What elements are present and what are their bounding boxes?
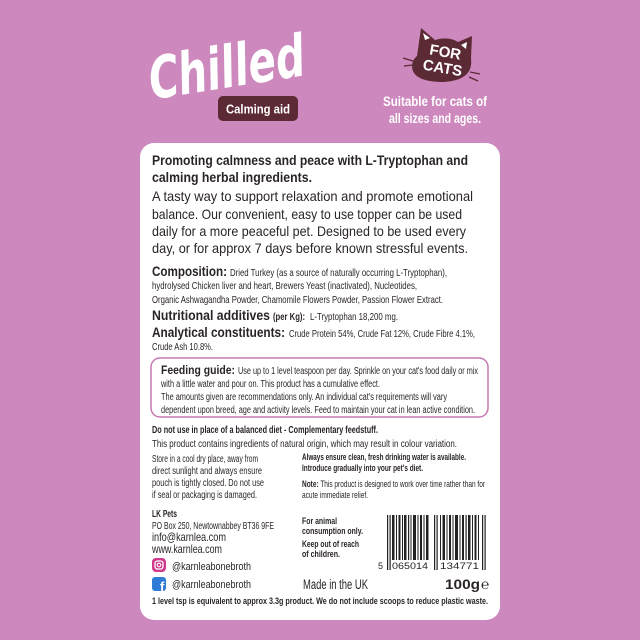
icon: cat head: CATS xyxy=(421,57,464,80)
text: made in the UK: Made in the UK xyxy=(303,577,368,592)
text: composition: L-Tryptophan 18,200 mg. xyxy=(310,311,398,323)
icon: instagram xyxy=(152,558,166,572)
icon: facebook: f xyxy=(160,579,165,594)
text: animal consumption: Keep out of reach xyxy=(302,539,359,550)
text: water and note: acute immediate relief. xyxy=(302,490,368,500)
text: composition xyxy=(152,263,475,353)
text: composition: Organic Ashwagandha Powder, Chamomile Flowers Powder, Passion Flower Extract. xyxy=(152,294,443,306)
icon: cat head: FOR xyxy=(428,41,463,64)
text: description xyxy=(152,188,473,256)
text: description: A tasty way to support relaxation and promote emotional xyxy=(152,188,473,204)
text: warnings: Do not use in place of a balanced diet - Complementary feedstuff. xyxy=(152,425,378,436)
text: contact xyxy=(151,508,274,556)
text: storage: if seal or packaging is damaged. xyxy=(152,490,257,501)
text: weight 100g: ℮ xyxy=(481,576,489,592)
text: animal consumption: consumption only. xyxy=(302,526,363,537)
text: composition: Nutritional additives xyxy=(152,307,270,323)
text: description: day, or for approx 7 days before known stressful events. xyxy=(152,240,468,256)
text: water and note xyxy=(302,452,485,500)
barcode: 5 xyxy=(378,561,383,571)
text: animal consumption: of children. xyxy=(302,549,340,560)
text: contact: LK Pets xyxy=(152,508,177,520)
text: composition: hydrolysed Chicken liver and heart, Brewers Yeast (inactivated), Nucleotides, xyxy=(152,280,417,292)
text: contact: PO Box 250, Newtownabbey BT36 9FE xyxy=(152,521,274,532)
text: footnote: 1 level tsp is equivalent to approx 3.3g product. We do not include scoops to reduce plastic waste. xyxy=(152,596,488,606)
text: description: daily for a more peaceful pet. Designed to be used every xyxy=(152,223,466,239)
text: water and note: Introduce gradually into your pet's diet. xyxy=(302,463,423,473)
text: warnings: This product contains ingredients of natural origin, which may result in colour variation. xyxy=(152,439,457,450)
text: contact: info@karnlea.com xyxy=(152,530,226,544)
text: composition: Crude Ash 10.8%. xyxy=(152,341,213,353)
text: composition: (per Kg): xyxy=(273,311,305,323)
text: water and note: Always ensure clean, fresh drinking water is available. xyxy=(302,452,466,462)
icon: facebook xyxy=(152,577,166,594)
text: warnings xyxy=(152,425,457,450)
callout: feeding guide xyxy=(151,358,488,417)
text: weight 100g: 100g xyxy=(445,576,480,592)
badge: calming aid xyxy=(218,96,298,121)
heading: promoting calmness: Promoting calmness and peace with L-Tryptophan and xyxy=(152,153,468,168)
text: animal consumption xyxy=(302,516,363,560)
text: water and note: Note: This product is designed to work over time rather than for xyxy=(302,479,485,489)
text: instagram handle: @karnleabonebroth xyxy=(172,561,251,573)
text: storage: direct sunlight and always ensure xyxy=(152,466,262,477)
callout: feeding guide: Feeding guide: xyxy=(161,363,235,377)
icon: cat head xyxy=(403,28,480,82)
text: facebook handle: @karnleabonebroth xyxy=(172,579,251,591)
text: animal consumption: For animal xyxy=(302,516,337,527)
text: description: balance. Our convenient, easy to use topper can be used xyxy=(152,206,462,222)
callout: feeding guide: Use up to 1 level teaspoon per day. Sprinkle on your cat's food daily or mix xyxy=(238,366,478,377)
barcode: 065014 xyxy=(392,561,428,571)
barcode: 134771 xyxy=(440,561,479,571)
text: composition: Dried Turkey (as a source of naturally occurring L-Tryptophan), xyxy=(230,267,447,279)
heading: promoting calmness xyxy=(152,153,468,185)
callout: feeding guide: with a little water and pour on. This product has a cumulative effect. xyxy=(160,379,380,390)
text: composition: Composition: xyxy=(152,263,227,279)
title: Chilled xyxy=(148,21,305,114)
badge: calming aid: Calming aid xyxy=(226,102,290,116)
text: contact: www.karnlea.com xyxy=(151,542,222,556)
text: composition: Analytical constituents: xyxy=(152,324,285,340)
heading: promoting calmness: calming herbal ingredients. xyxy=(152,170,312,185)
text: suitable for cats xyxy=(383,93,487,126)
text: suitable for cats: Suitable for cats of xyxy=(383,93,487,109)
callout: feeding guide: dependent upon breed, age and activity levels. Feed to maintain your cat in lean active condition. xyxy=(161,405,475,416)
callout: feeding guide: The amounts given are recommendations only. An individual cat's requirements will vary xyxy=(161,392,447,403)
panel: info card xyxy=(140,143,500,620)
text: storage: Store in a cool dry place, away from xyxy=(152,454,258,465)
text: suitable for cats: all sizes and ages. xyxy=(389,110,481,126)
text: composition: Crude Protein 54%, Crude Fat 12%, Crude Fibre 4.1%, xyxy=(289,328,475,340)
barcode xyxy=(378,515,486,571)
text: storage xyxy=(152,454,264,501)
text: storage: pouch is tightly closed. Do not use xyxy=(152,478,264,489)
